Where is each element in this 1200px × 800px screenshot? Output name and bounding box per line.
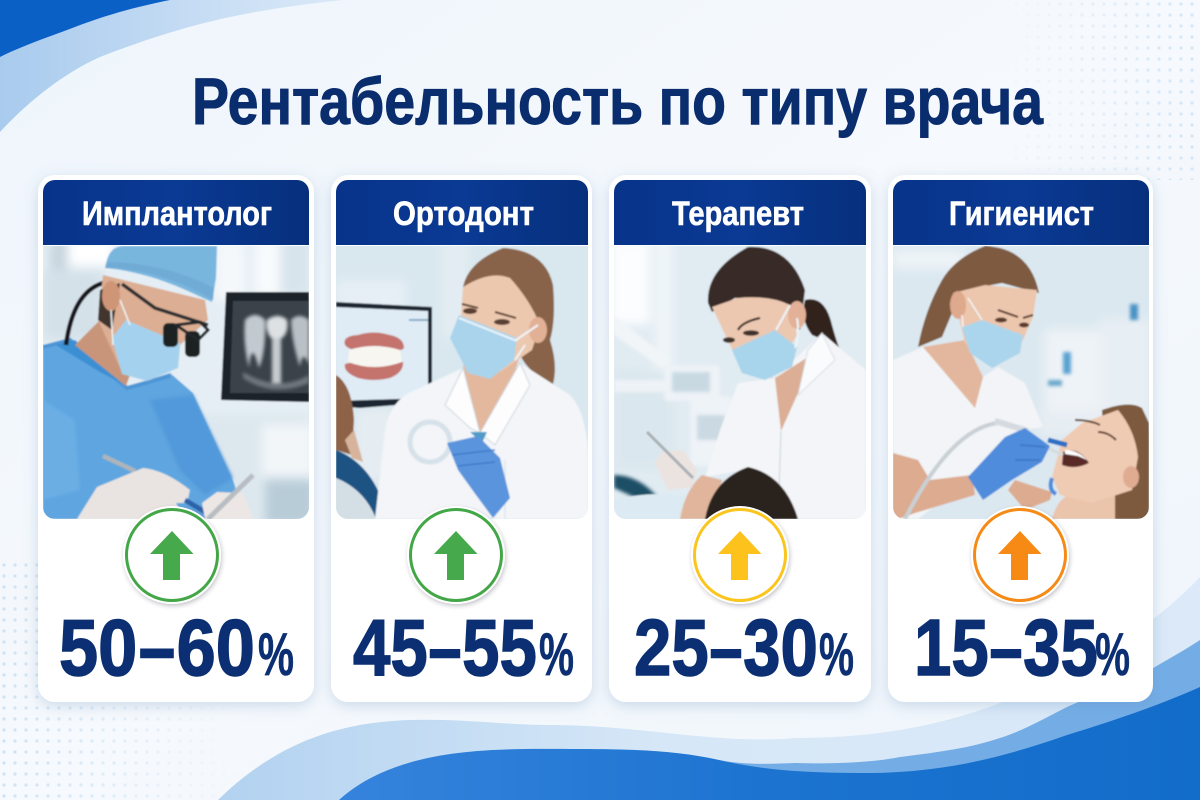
card 4 value: % <box>1095 621 1130 688</box>
panel: терапевт <box>609 175 871 702</box>
photo: implantologist <box>43 240 315 525</box>
card 1 value: – <box>139 609 175 689</box>
card 3 header <box>614 180 866 245</box>
photo: orthodontist <box>336 240 588 519</box>
forearm <box>1008 480 1052 510</box>
hair <box>463 248 555 384</box>
mask <box>732 330 797 380</box>
card 2 heading: Ортодонт <box>393 195 534 233</box>
coat <box>705 333 866 519</box>
hand + instruments <box>103 456 135 471</box>
card 3 base <box>609 175 871 702</box>
card 3 indicator <box>691 506 789 604</box>
card 2 base <box>331 175 592 702</box>
card 2 value: – <box>429 611 461 687</box>
card 4 value <box>914 602 1130 692</box>
panel: имплантолог <box>38 175 315 702</box>
card 3 value: % <box>819 621 854 688</box>
title: Рентабельность по типу врача <box>192 64 1044 138</box>
sheet <box>628 493 662 503</box>
card 1 value: 60 <box>177 603 255 692</box>
glove + probe <box>655 450 697 490</box>
arm <box>893 453 975 519</box>
mask <box>112 320 180 381</box>
card 1 indicator <box>123 506 221 604</box>
patient <box>1102 404 1149 519</box>
panel: ортодонт <box>331 175 592 702</box>
gown <box>43 340 245 519</box>
card 3 value: 30 <box>743 602 818 692</box>
scaler hose <box>905 423 997 519</box>
card 3 heading: Терапевт <box>672 195 804 233</box>
panel: гигиенист <box>888 175 1153 702</box>
face <box>460 275 540 372</box>
card 4 header <box>893 180 1149 245</box>
coat <box>375 363 588 519</box>
patient <box>336 375 354 455</box>
card 1 heading: Имплантолог <box>82 195 272 233</box>
monitor <box>336 302 432 408</box>
card 2 indicator <box>407 506 505 604</box>
card 2 value: % <box>539 621 574 688</box>
hair <box>708 247 805 330</box>
ponytail and hair <box>918 246 1039 347</box>
aligner <box>410 422 450 462</box>
ponytail <box>804 299 840 350</box>
card 1 value: 50 <box>59 603 137 692</box>
card 4 heading: Гигиенист <box>949 195 1094 233</box>
loupes <box>122 284 208 325</box>
card 2 header <box>336 180 588 245</box>
face <box>712 297 797 378</box>
glove <box>447 436 510 518</box>
card 4 value: 35 <box>1023 602 1098 692</box>
glove <box>968 428 1050 500</box>
card 4 value: 15 <box>914 602 989 692</box>
head <box>98 275 208 380</box>
photo: hygienist <box>893 246 1150 519</box>
neck <box>463 355 520 435</box>
card 1 header <box>43 180 309 245</box>
card 4 value: – <box>990 611 1022 687</box>
mask <box>962 320 1023 368</box>
card 2 value: 45 <box>353 602 428 692</box>
card 3 value <box>634 602 854 692</box>
face <box>953 285 1037 367</box>
card 3 value: – <box>710 611 742 687</box>
card 1 value <box>59 603 294 692</box>
card 4 base <box>888 175 1153 702</box>
card 2 value <box>353 602 574 692</box>
coat <box>893 347 1043 519</box>
card 3 value: 25 <box>634 602 709 692</box>
mask <box>450 315 517 379</box>
card 1 value: % <box>258 621 294 688</box>
card 2 value: 55 <box>462 602 537 692</box>
photo: therapist <box>610 240 866 519</box>
card 1 base <box>38 175 314 702</box>
card 4 indicator <box>971 506 1069 604</box>
patient <box>680 475 722 519</box>
